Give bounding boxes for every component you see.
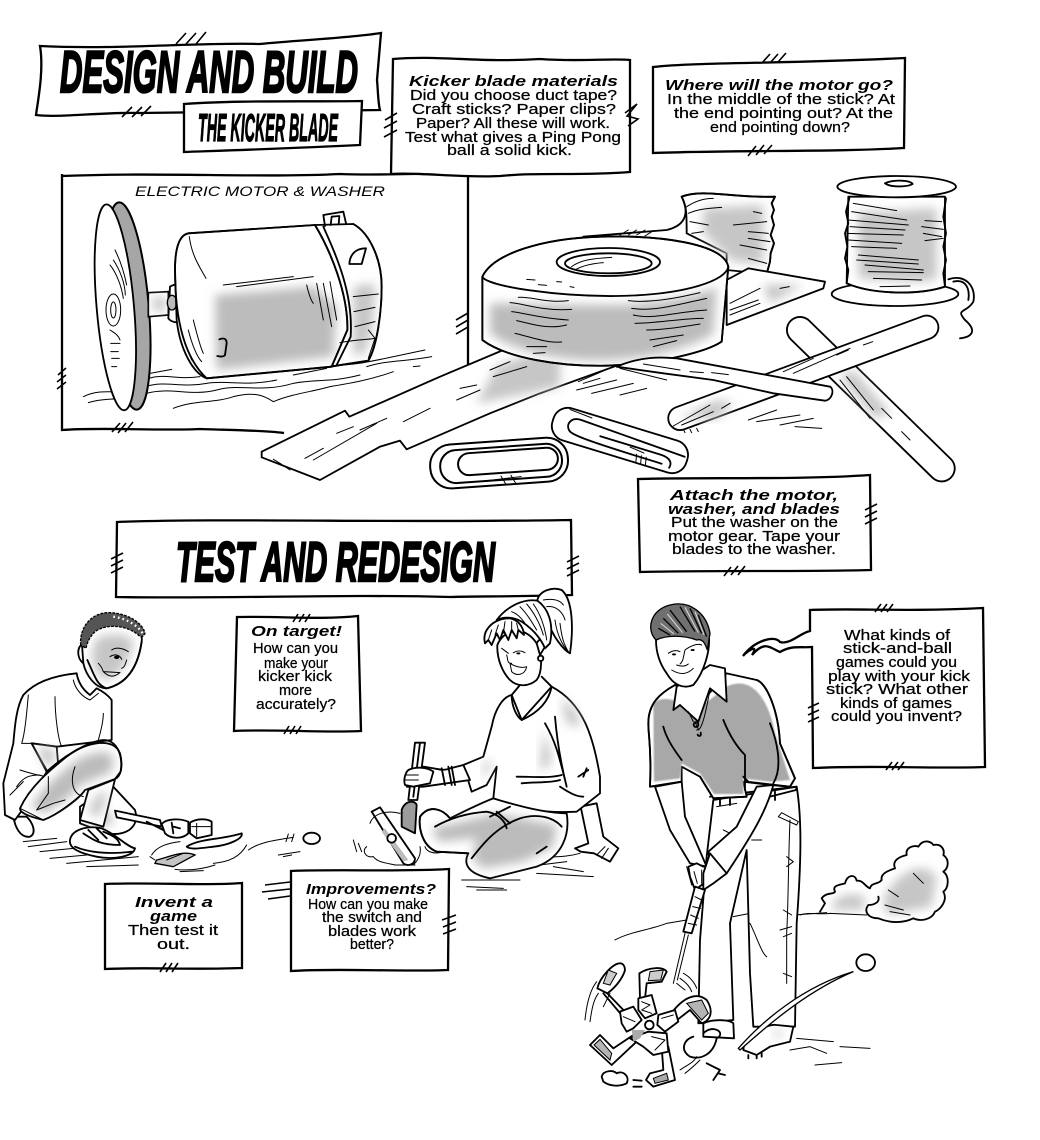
text box: attach the motor, washer, and blades: Put the washer on the (671, 515, 838, 531)
hand fingers (404, 768, 433, 787)
text box: attach the motor, washer, and blades: Attach the motor, (669, 488, 838, 504)
text box: kicker blade materials (384, 58, 638, 176)
shirt (648, 673, 795, 798)
text box: on target: kicker kick (258, 669, 333, 685)
text box: where will the motor go: end pointing down? (710, 120, 850, 136)
forearm (32, 743, 58, 773)
ponytail (537, 589, 572, 653)
neck and head (497, 631, 541, 685)
back arm and hand (575, 803, 618, 862)
face (98, 648, 128, 676)
club handle and shaft (683, 887, 705, 933)
tape strip (583, 193, 775, 274)
hands and grip (688, 863, 710, 890)
text box: improvements: Improvements? (306, 882, 436, 898)
text box: attach the motor, washer, and blades: blades to the washer. (672, 542, 836, 558)
speech bubble: stick-and-ball games: could you invent? (831, 709, 962, 725)
illustration: craft stick board on table (262, 297, 660, 480)
illustration: bush (800, 841, 948, 922)
text box: attach the motor, washer, and blades: washer, and blades (668, 502, 840, 518)
title box: Design and Build (36, 32, 381, 117)
spool of thread (832, 176, 974, 338)
subtitle box: The Kicker Blade (184, 101, 362, 152)
ground hatching (462, 853, 593, 890)
horizon line (615, 913, 827, 940)
spinning blades (187, 833, 242, 849)
motion line and ball (248, 834, 300, 857)
washer (88, 201, 158, 412)
text box: invent a game: Invent a (135, 895, 213, 911)
text box: on target: On target! (251, 624, 342, 640)
text box: kicker blade materials: Paper? All these will work. (416, 116, 610, 132)
table surface hatching (83, 350, 432, 408)
speech bubble: stick-and-ball games (743, 604, 985, 770)
illustration: man with golf club kick stick (585, 604, 875, 1087)
text box: on target: make your (264, 656, 328, 672)
speech bubble: stick-and-ball games: stick? What other (826, 682, 968, 698)
text box: invent a game: Then test it (128, 923, 218, 939)
shirt (3, 673, 112, 820)
speech bubble: stick-and-ball games: play with your kick (828, 669, 971, 685)
ground hatching (790, 1038, 870, 1065)
hands gripping clubs (620, 1007, 642, 1032)
kick stick and motor (115, 811, 162, 827)
text box: improvements (262, 869, 456, 971)
forearm and hand (407, 765, 470, 787)
arms (655, 782, 707, 867)
ball trail (738, 972, 853, 1050)
illustration: woman with kick stick (353, 589, 618, 890)
illustration: electric motor and washer (83, 201, 432, 412)
panel: electric motor and washer frame (57, 173, 468, 433)
motor body (175, 212, 382, 378)
illustration: boy with kick stick (3, 613, 320, 872)
rear of board (727, 268, 825, 325)
shoes (703, 1020, 734, 1038)
text box: on target: accurately? (256, 697, 336, 713)
back leg and arm (80, 785, 136, 834)
motor and blades (402, 802, 417, 833)
speech bubble: stick-and-ball games: kinds of games (840, 696, 952, 712)
trousers (698, 787, 800, 1027)
text box: on target: more (279, 683, 312, 699)
face (502, 648, 527, 674)
paper clip right (548, 404, 692, 477)
text box: attach the motor, washer, and blades: motor gear. Tape your (668, 529, 840, 545)
ball (856, 954, 875, 971)
text box: invent a game (105, 883, 242, 972)
speech bubble: stick-and-ball games: What kinds of (844, 628, 951, 644)
text box: kicker blade materials: Kicker blade materials (409, 74, 618, 90)
speech bubble: stick-and-ball games: games could you (836, 655, 957, 671)
title text: DESIGN AND BUILD (60, 40, 358, 105)
caption: electric motor and washer: ELECTRIC MOTOR & WASHER (135, 183, 385, 199)
head (82, 617, 142, 688)
text box: improvements: better? (350, 937, 394, 953)
text box: invent a game: game (149, 909, 197, 925)
collar (673, 665, 727, 722)
text: THE KICKER BLADE (198, 107, 338, 150)
tape roll (482, 236, 728, 366)
shin (80, 779, 115, 827)
text box: attach the motor, washer, and blades (638, 475, 877, 576)
motor shaft (148, 284, 189, 322)
text box: kicker blade materials: Did you choose duct tape? (410, 88, 617, 104)
illustration: paper clip left (429, 436, 569, 490)
text box: kicker blade materials: Test what gives a Ping Pong (405, 130, 621, 146)
text box: on target (234, 614, 361, 734)
text box: where will the motor go: Where will the motor go? (665, 78, 893, 94)
speech bubble: stick-and-ball games: stick-and-ball (843, 641, 952, 657)
kick stick (408, 743, 425, 800)
text box: kicker blade materials: ball a solid kick. (447, 143, 572, 159)
pinwheel of golf clubs (585, 963, 725, 1087)
title box: Test and Redesign: TEST AND REDESIGN (176, 530, 496, 593)
text box: on target: How can you (253, 641, 338, 657)
text box: improvements: How can you make (308, 897, 428, 913)
text box: where will the motor go: the end pointing out? At the (674, 106, 893, 122)
hair (81, 613, 145, 648)
text box: improvements: blades work (328, 924, 417, 940)
text box: where will the motor go: In the middle of the stick? At (667, 92, 895, 108)
shoe (70, 827, 135, 858)
head (656, 631, 709, 687)
illustration: duct tape roll and strip (482, 176, 974, 477)
text box: kicker blade materials: Craft sticks? Paper clips? (412, 102, 616, 118)
jeans (420, 798, 567, 878)
ground hatching (23, 838, 138, 867)
thigh and knee (20, 743, 121, 820)
hair (497, 600, 551, 648)
sweater (463, 687, 600, 812)
hair (651, 604, 710, 650)
text box: improvements: the switch and (322, 910, 422, 926)
title box: Test and Redesign (111, 520, 579, 597)
text box: where will the motor go (653, 53, 905, 156)
text box: invent a game: out. (157, 937, 190, 953)
craft sticks (577, 327, 942, 468)
